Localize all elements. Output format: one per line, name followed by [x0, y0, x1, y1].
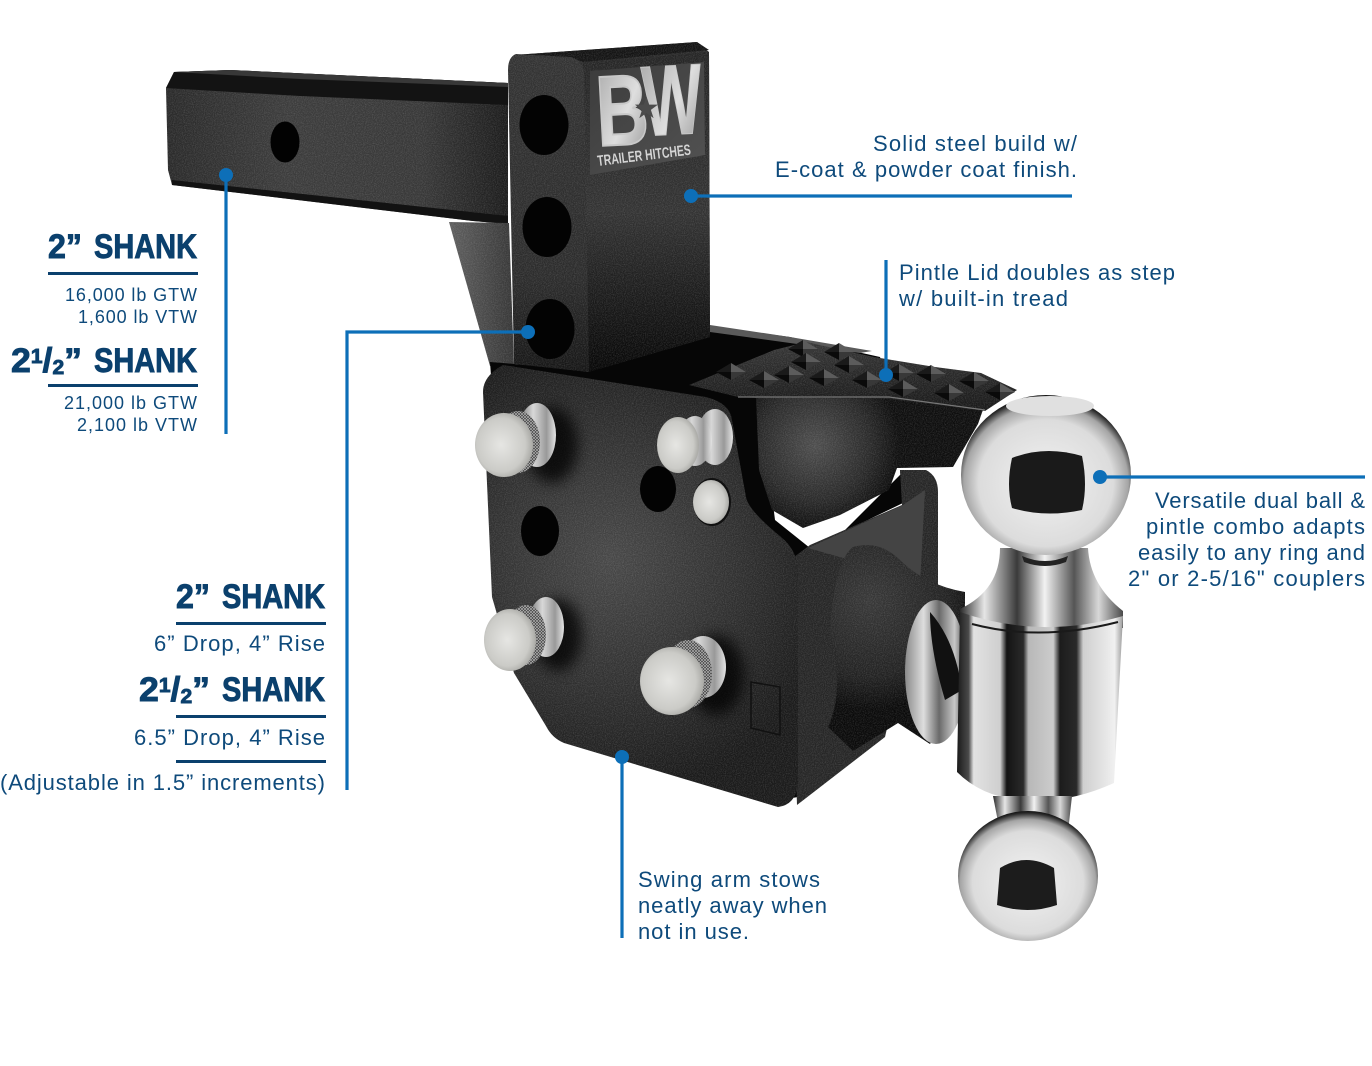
top ball reflection — [1009, 451, 1085, 514]
chrome collar — [905, 600, 967, 744]
heading: 2 1/2 inch shank: 2 — [52, 357, 64, 379]
text: dual ball — [1128, 488, 1365, 591]
heading: 2 1/2 inch shank drop: 2 — [139, 671, 158, 709]
heading: 2 1/2 inch shank drop — [139, 671, 325, 709]
tread pyramids — [716, 340, 1015, 401]
swing arm neck — [828, 545, 965, 751]
heading: 2 1/2 inch shank: 2 — [11, 342, 30, 380]
heading: 2 1/2 inch shank: SHANK — [94, 342, 197, 380]
2 1/2 inch drop values: 6.5” Drop, 4” Rise — [134, 725, 325, 750]
text: dual ball: Versatile dual ball & — [1155, 488, 1365, 513]
heading: 2 inch shank drop: 2” — [176, 578, 210, 616]
stamped rectangle — [751, 682, 780, 735]
column holes — [520, 95, 574, 359]
text: pintle lid: Pintle Lid doubles as step — [899, 260, 1175, 285]
text: swing arm: neatly away when — [638, 893, 827, 918]
callout: swing arm leader — [615, 750, 629, 938]
callout: drop and rise leader — [347, 325, 535, 790]
heading: 2 inch shank: SHANK — [94, 228, 197, 266]
B&W logo panel: TRAILER HITCHES — [596, 142, 692, 170]
heading: 2 1/2 inch shank — [11, 342, 197, 380]
2 1/2 inch ratings: 21,000 lb GTW — [64, 393, 197, 413]
2 inch ratings: 1,600 lb VTW — [78, 307, 197, 327]
drop shank tube — [166, 70, 508, 224]
text: swing arm: not in use. — [638, 919, 749, 944]
pin knob top left — [475, 403, 578, 483]
text: swing arm: Swing arm stows — [638, 867, 820, 892]
rear gusset — [449, 222, 514, 366]
text: dual ball: easily to any ring and — [1138, 540, 1365, 565]
heading: 2 1/2 inch shank drop: SHANK — [222, 671, 325, 709]
top ball — [961, 395, 1131, 555]
heading: 2 1/2 inch shank: ” — [64, 342, 82, 380]
bottom ball — [958, 811, 1098, 941]
heading: 2 1/2 inch shank drop: / — [171, 671, 181, 709]
pin knob lower left — [484, 597, 582, 671]
mount bracket rear — [790, 470, 938, 805]
bottom ball reflection — [997, 860, 1057, 910]
plate holes — [521, 466, 676, 556]
text: solid steel build: E-coat & powder coat finish. — [775, 157, 1077, 182]
text: towing capacity block — [11, 228, 198, 435]
callout: dual ball leader — [1093, 470, 1365, 484]
chrome dual ball — [957, 395, 1131, 941]
text: solid steel build: Solid steel build w/ — [873, 131, 1078, 156]
heading: 2 inch shank drop: SHANK — [222, 578, 325, 616]
pin knob lower right — [640, 635, 744, 715]
2 1/2 inch ratings: 2,100 lb VTW — [77, 415, 197, 435]
heading: 2 1/2 inch shank drop: 2 — [180, 686, 192, 708]
text: pintle lid: w/ built-in tread — [898, 286, 1068, 311]
text: dual ball: pintle combo adapts — [1146, 514, 1365, 539]
text: swing arm — [638, 867, 827, 944]
text: pintle lid — [898, 260, 1175, 311]
B&W logo panel: ★ — [633, 92, 660, 125]
recess top edge — [710, 325, 872, 353]
2 inch ratings: 16,000 lb GTW — [65, 285, 197, 305]
B&W logo panel: W — [639, 43, 705, 158]
callout: shank rating leader — [219, 168, 233, 434]
heading: 2 inch shank — [48, 228, 197, 266]
heading: 2 inch shank drop — [176, 578, 325, 616]
2 1/2 inch ratings — [64, 393, 197, 435]
upright column — [508, 42, 710, 372]
hitch product illustration — [166, 42, 1131, 941]
callout: pintle lid leader — [879, 260, 893, 382]
cylinder top rim shadow — [972, 622, 1118, 633]
lid front edge highlight — [738, 397, 985, 410]
2 inch drop values: 6” Drop, 4” Rise — [154, 631, 325, 656]
pin knob top right — [657, 409, 733, 473]
recess shadow behind tread — [490, 325, 905, 800]
text: solid steel build — [775, 131, 1078, 182]
top ball cap — [1006, 396, 1094, 416]
adjustment plate — [483, 365, 798, 807]
heading: 2 1/2 inch shank: 1 — [31, 346, 43, 368]
heading: 2 1/2 inch shank drop: ” — [192, 671, 210, 709]
2 inch ratings — [65, 285, 197, 327]
text: drop and rise block — [0, 578, 326, 795]
B&W logo panel — [590, 43, 705, 175]
text: dual ball: 2" or 2-5/16" couplers — [1128, 566, 1365, 591]
neck lower — [993, 796, 1072, 832]
small rivet — [693, 478, 731, 526]
neck ring under ball — [1022, 556, 1068, 566]
main cylinder — [957, 612, 1123, 800]
heading: 2 1/2 inch shank drop: 1 — [159, 675, 171, 697]
callout: finish leader — [684, 189, 1072, 203]
heading: 2 1/2 inch shank: / — [43, 342, 53, 380]
B&W logo panel: B — [593, 53, 651, 168]
heading: 2 inch shank: 2” — [48, 228, 82, 266]
neck upper — [960, 548, 1123, 628]
pintle lid body — [689, 342, 1017, 528]
shank pin hole — [270, 122, 300, 162]
adjustable note: (Adjustable in 1.5” increments) — [0, 770, 325, 795]
